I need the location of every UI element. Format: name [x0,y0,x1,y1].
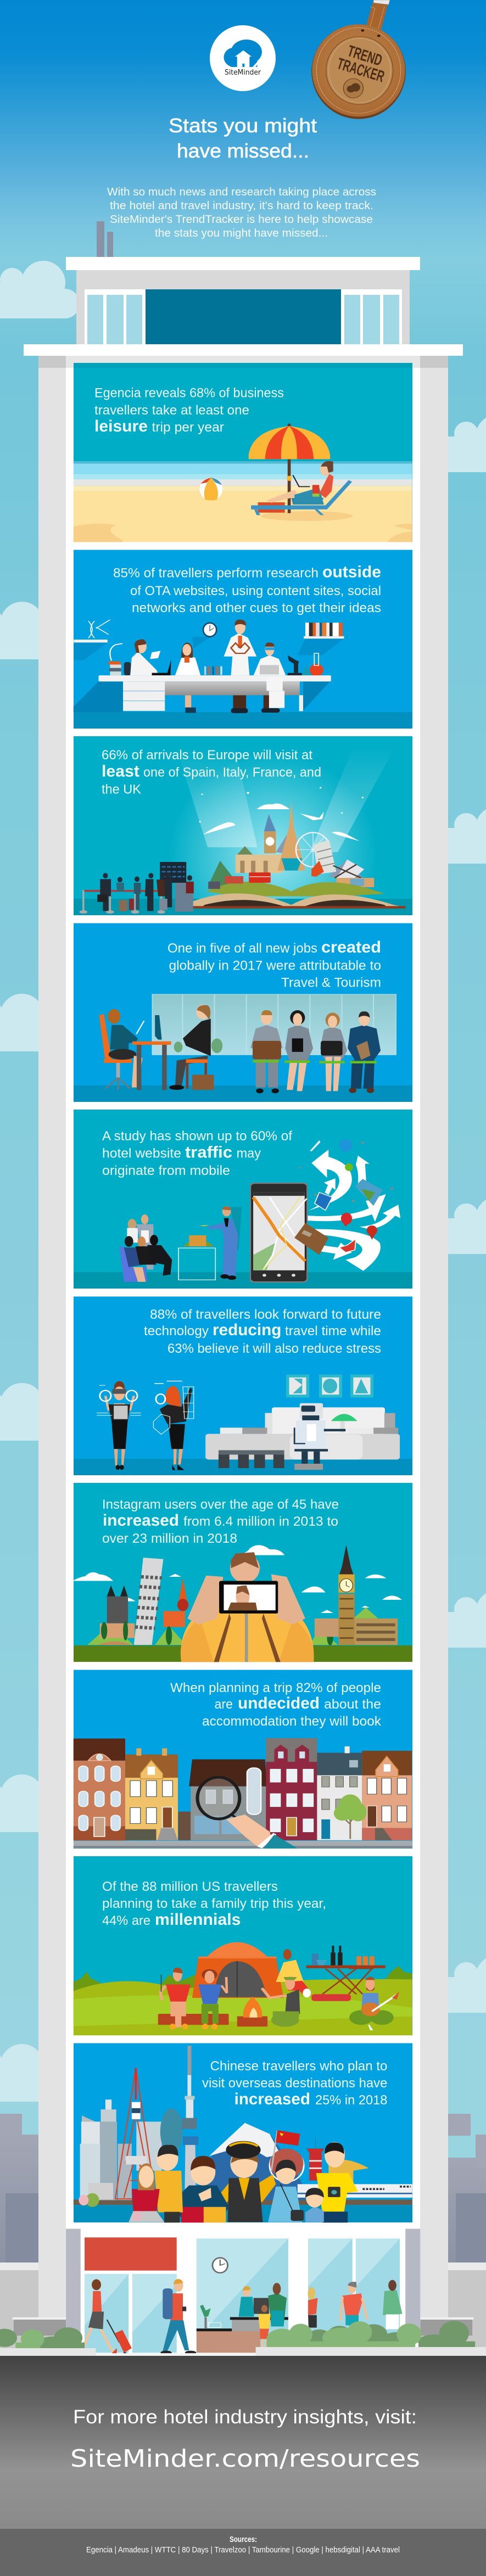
panel: undecided accommodation [74,1670,412,1849]
sources footer: Egencia | Amadeus | WTTC | 80 Days | Travelzoo | Tambourine | Google | hebsdigital | AAA travel [86,2545,400,2555]
stat text: created [321,938,381,956]
stat text: globally in 2017 were attributable to [169,958,381,973]
logo: SiteMinder: SiteMinder [225,69,261,77]
interview illustration [99,994,396,1093]
side clouds [0,415,486,2102]
Asia landmarks and tourists illustration [74,2046,412,2222]
logo: SiteMinder [210,25,276,91]
Europe pop-up book illustration [79,747,405,914]
clock [211,2257,228,2273]
stat text: over 23 million in 2018 [102,1531,237,1546]
luggage tag: Trend Tracker: TREND [345,42,384,70]
stat text: 44% are [102,1913,150,1928]
stat text: visit overseas destinations have [202,2076,387,2091]
intro text: With so much news and research taking place across [107,186,376,198]
panel: future technology [74,1297,412,1475]
intro text: SiteMinder's TrendTracker is here to help showcase [110,213,373,226]
intro text: the hotel and travel industry, it's hard to keep track. [110,199,373,212]
stat text: When planning a trip 82% of people [170,1681,381,1695]
robot and sofa illustration [97,1375,400,1470]
stat text: about the [324,1697,381,1712]
panel: Chinese travellers [74,2043,412,2222]
panel: millennials family trip [74,1856,412,2035]
panel: Travel and Tourism jobs [74,923,412,1102]
intro text: the stats you might have missed... [155,227,328,239]
lab illustration [74,620,344,713]
panel: Egencia beach [74,363,412,542]
stat text: travellers take at least one [94,403,249,418]
stat text [202,2059,387,2108]
intro text [107,186,376,239]
stat text [144,1307,381,1356]
stat text: 85% of travellers perform research [113,566,319,581]
stat text [94,385,284,435]
camping illustration [74,1942,412,2035]
stat text: increased [234,2090,310,2108]
panel: research outside OTA [74,550,412,729]
stat text: One in five of all new jobs [167,941,317,956]
pavement [0,2347,486,2356]
stat text: of OTA websites, using content sites, social [130,584,381,598]
city skyline [0,2114,486,2356]
stat text [102,1129,292,1178]
sources footer [0,2529,486,2576]
stat text: increased [103,1511,179,1530]
stat text: travel time while [285,1324,381,1339]
street of houses illustration [74,1738,412,1849]
top-left cloud [0,261,80,318]
beach illustration [74,424,412,542]
panel: arrivals to Europe [74,736,412,915]
stat text [102,1879,326,1929]
phone and arrows illustration [119,1139,400,1283]
stat text: accommodation they will book [202,1714,382,1729]
stat text [102,1497,339,1546]
call to action band [0,2356,486,2529]
stat text: millennials [155,1911,241,1929]
stat text: the UK [102,782,142,797]
building: rooftop [24,221,463,356]
stat text: one of Spain, Italy, France, and [143,765,321,780]
stat text: planning to take a family trip this year, [102,1896,326,1911]
title: have missed... [177,139,309,162]
luggage tag: Trend Tracker: TRACKER [335,55,386,86]
sources footer: Sources: [230,2535,257,2544]
stat text: may [237,1146,261,1161]
stat text: Of the 88 million US travellers [102,1879,278,1894]
stat text: technology [144,1324,209,1339]
title [169,114,317,162]
stat text: Travel & Tourism [281,976,381,990]
stat text: A study has shown up to 60% of [102,1129,292,1144]
stat text: reducing [213,1321,281,1339]
stat text: undecided [238,1694,320,1712]
panel: mobile traffic [74,1110,412,1289]
stat text: Chinese travellers who plan to [210,2059,387,2074]
stat text: networks and other cues to get their ideas [132,601,381,615]
stat text: leisure [94,417,148,435]
stat text: 66% of arrivals to Europe will visit at [102,748,312,763]
panel: Instagram users [74,1483,412,1662]
stat text [113,563,381,615]
stat text: traffic [185,1143,232,1162]
stat text: least [102,763,139,781]
building: main tower [38,356,448,2317]
stat text: 88% of travellers look forward to future [150,1307,381,1322]
stat text: from 6.4 million in 2013 to [183,1514,338,1529]
stat text: are [214,1697,233,1712]
stat text: Instagram users over the age of 45 have [102,1497,339,1512]
stat text [167,938,381,990]
stat text: originate from mobile [102,1163,230,1178]
luggage tag: Trend Tracker [311,0,406,119]
stat text: outside [322,563,381,581]
stat text [102,748,321,797]
stat text: trip per year [152,420,224,435]
call to action band: SiteMinder.com/resources [70,2445,420,2473]
stat text [170,1681,382,1729]
call to action band: For more hotel industry insights, visit: [73,2406,417,2428]
ground floor: hotel entrance [0,2229,486,2356]
stat text: 63% believe it will also reduce stress [167,1341,381,1356]
bushes [0,2321,475,2349]
title: Stats you might [169,114,317,137]
photographer and landmarks illustration [74,1545,402,1662]
stat text: Egencia reveals 68% of business [94,385,284,401]
stat text: hotel website [102,1146,181,1161]
stat text: 25% in 2018 [315,2093,387,2108]
